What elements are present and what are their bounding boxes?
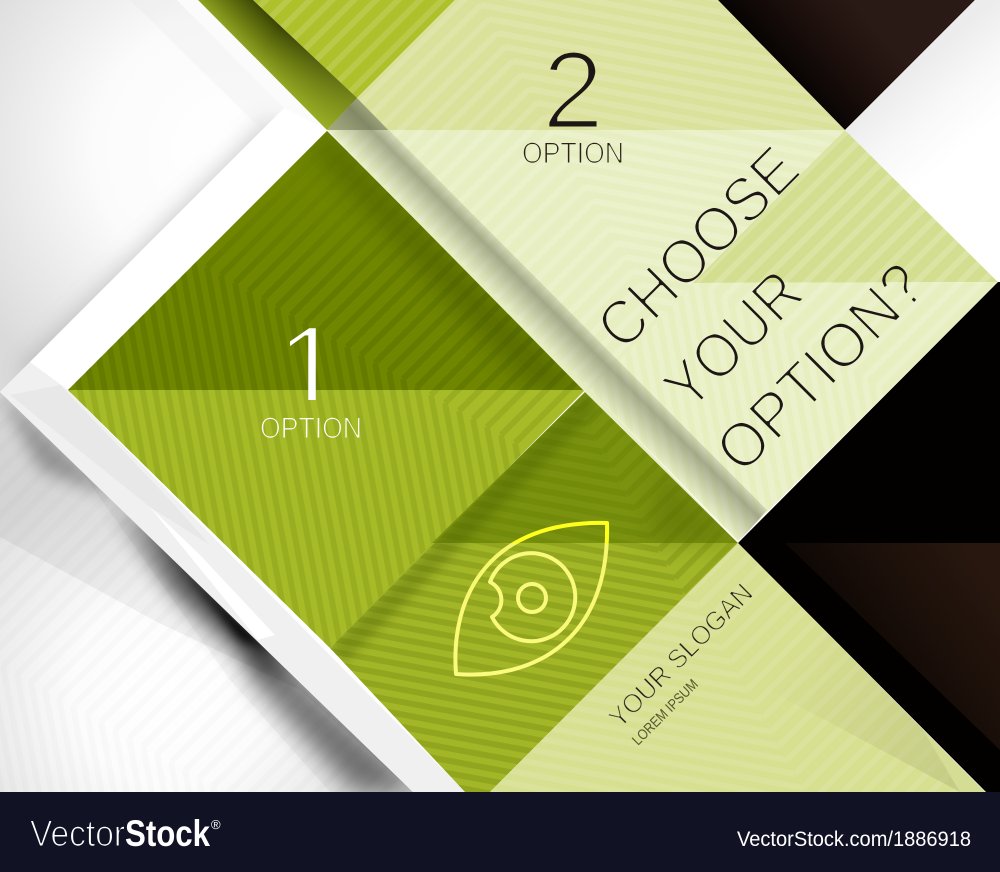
panel: slogan pale green bbox=[490, 543, 985, 792]
icon: eye leaf bbox=[455, 523, 607, 675]
slogan text: YOUR SLOGAN bbox=[603, 578, 759, 733]
number 1: 1 bbox=[277, 302, 343, 434]
number 2: 2 bbox=[542, 29, 604, 152]
panel: option 2 pale lower bbox=[327, 130, 845, 543]
heading: choose your option: CHOOSE bbox=[583, 133, 813, 363]
footer logo bbox=[30, 813, 221, 854]
panel: right black area bbox=[738, 282, 1000, 792]
background: lower left grey panel bbox=[0, 392, 420, 792]
label: option 2: OPTION bbox=[522, 137, 624, 170]
label: option 1: OPTION bbox=[260, 412, 362, 445]
heading: choose your option: OPTION? bbox=[702, 250, 939, 486]
dark green shadow band bbox=[198, 0, 388, 130]
grey shadow band bbox=[327, 98, 767, 543]
heading: choose your option: YOUR bbox=[650, 257, 817, 423]
panel: top right white triangle bbox=[845, 0, 1000, 284]
panel: option 1 light green triangle bbox=[68, 390, 585, 648]
footer logo: ® bbox=[211, 817, 221, 832]
panel: top bright green bbox=[253, 0, 455, 98]
footer logo: Vector bbox=[30, 813, 125, 854]
stripes on pale panels bbox=[253, 0, 998, 541]
panel: question right pale bbox=[590, 130, 998, 541]
panel: option 1 dark green triangle bbox=[68, 131, 585, 390]
footer id: VectorStock.com/1886918 bbox=[737, 828, 971, 851]
heading: choose your option bbox=[583, 133, 939, 486]
panel: top dark triangle bbox=[718, 0, 975, 130]
background: upper left grey panel bbox=[0, 0, 284, 392]
footer bar bbox=[0, 792, 1000, 872]
footer logo: Stock bbox=[125, 813, 210, 854]
slogan text: LOREM IPSUM bbox=[630, 677, 702, 749]
white frame chevron bbox=[0, 0, 465, 792]
panel: option 2 pale upper bbox=[357, 0, 845, 130]
panel: icon area green bbox=[330, 392, 738, 792]
